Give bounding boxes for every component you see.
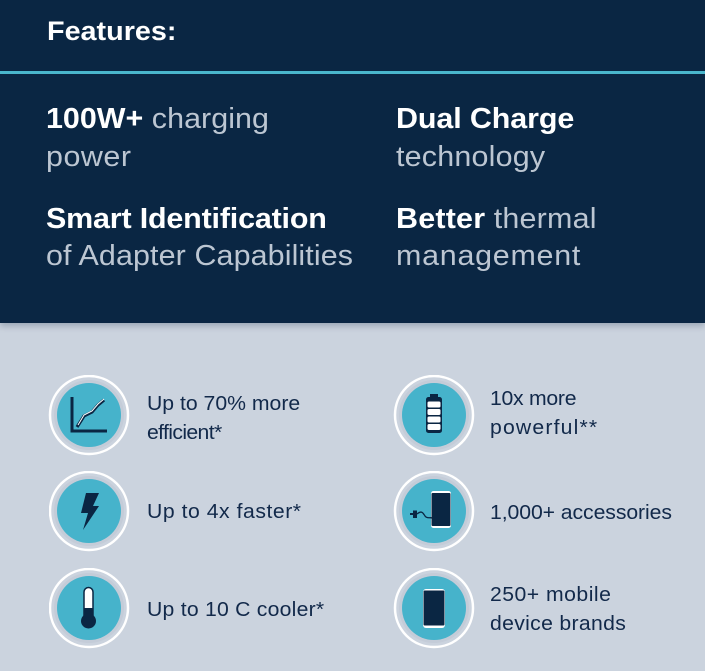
text: accessories: 1,000+ accessories xyxy=(490,502,672,524)
text: powerful xyxy=(490,388,598,439)
icon: mobile phone xyxy=(394,568,474,648)
feature: smart identification: Smart Identification xyxy=(46,202,327,234)
feature: thermal management: Better thermal xyxy=(396,202,597,234)
feature: thermal management xyxy=(396,202,597,272)
feature: thermal management: management xyxy=(396,240,581,272)
heading: Features: Features: xyxy=(47,16,176,46)
text: brands: 250+ mobile xyxy=(490,584,611,606)
feature: dual charge: technology xyxy=(396,140,545,172)
feature: charging power: power xyxy=(46,140,132,172)
icon: accessories phone and plug xyxy=(394,471,474,552)
feature: charging power xyxy=(46,103,269,172)
text: cooler: Up to 10 C cooler* xyxy=(147,599,324,621)
accent rule xyxy=(0,71,705,74)
text: faster: Up to 4x faster* xyxy=(147,501,302,523)
icon: thermometer xyxy=(49,568,130,648)
text: efficient: efficient* xyxy=(147,422,222,444)
text: powerful: powerful** xyxy=(490,417,598,439)
text: powerful: 10x more xyxy=(490,388,576,410)
icon: efficiency chart xyxy=(48,375,130,456)
feature: smart identification xyxy=(46,202,353,272)
feature: smart identification: of Adapter Capabilities xyxy=(46,240,353,272)
text: brands: device brands xyxy=(490,613,626,635)
icon: battery xyxy=(394,375,474,456)
feature: charging power: 100W+ charging xyxy=(46,103,269,135)
text: efficient xyxy=(147,393,300,444)
feature: dual charge: Dual Charge xyxy=(396,103,574,135)
feature: dual charge xyxy=(396,103,574,172)
icon: lightning bolt xyxy=(49,471,130,552)
panel: features xyxy=(0,0,705,323)
text: efficient: Up to 70% more xyxy=(147,393,300,415)
text: brands xyxy=(490,584,626,635)
